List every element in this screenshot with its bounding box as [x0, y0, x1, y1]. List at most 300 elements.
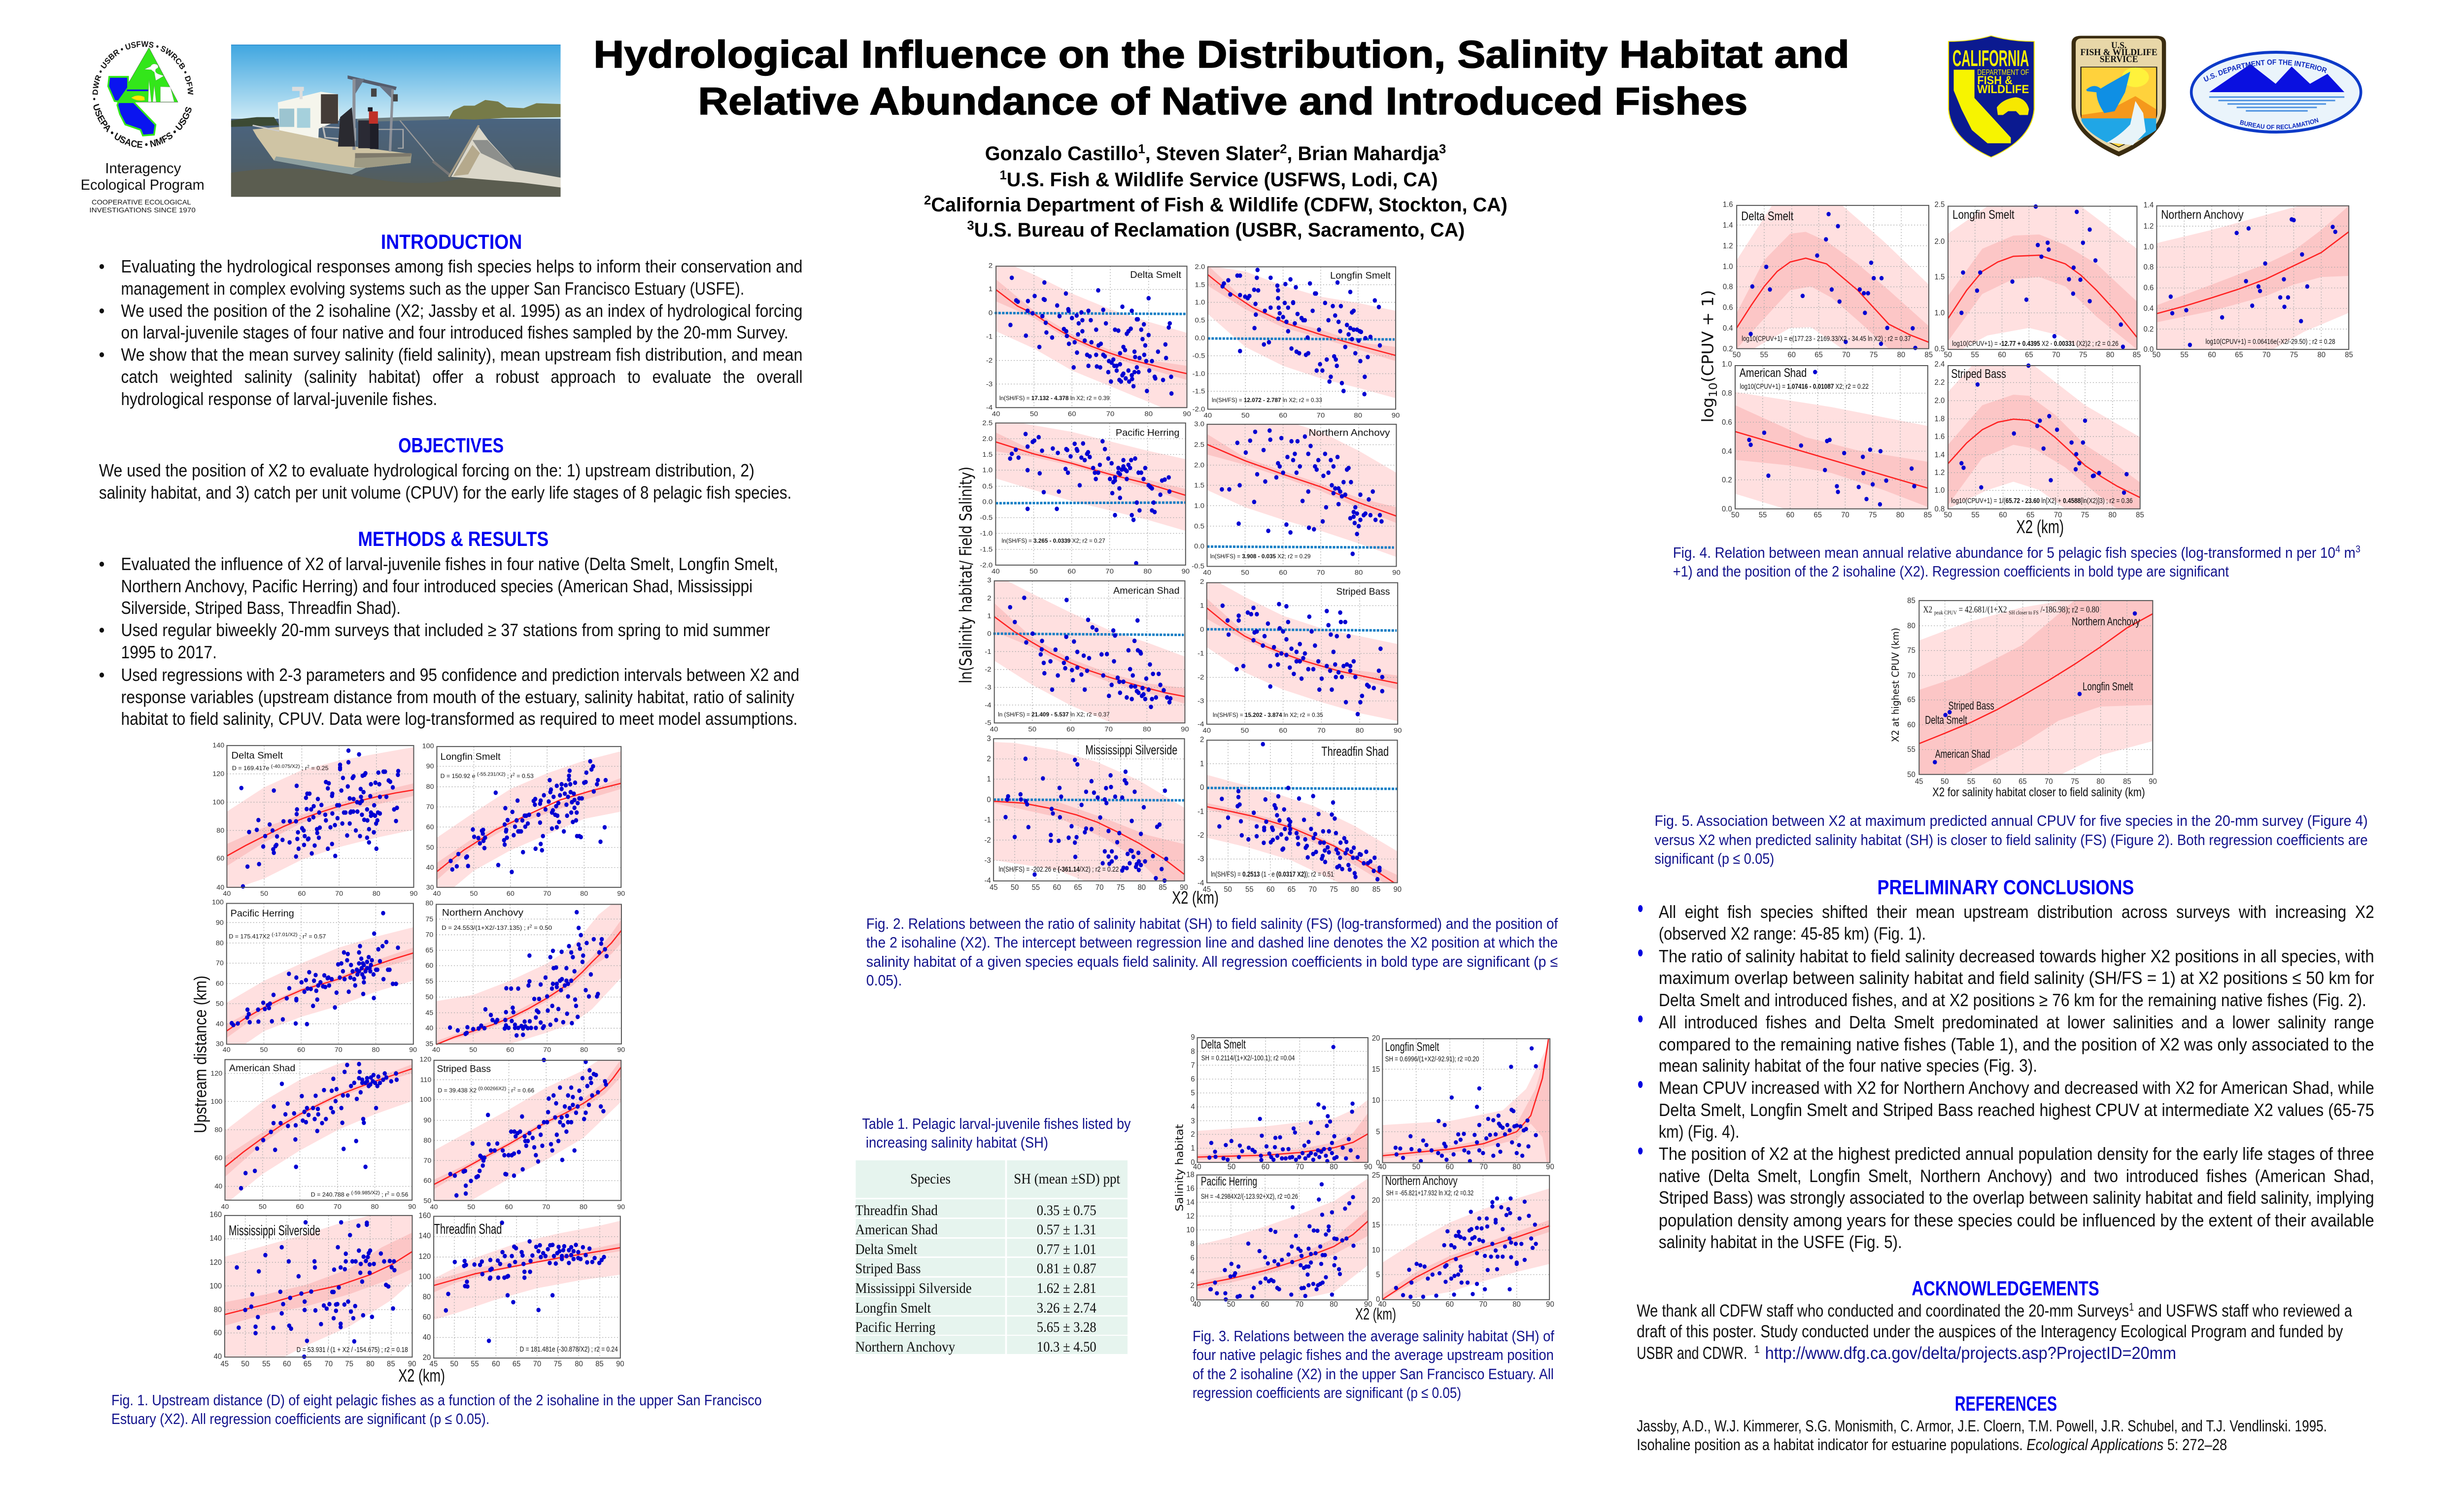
- plot: fig 2 delta smelt: Delta Smelt: [1130, 269, 1181, 280]
- plot: fig 1 striped bass: (0.00266X2): [479, 1086, 506, 1091]
- plot: fig 2 northern anchovy: 50: [1241, 569, 1249, 577]
- plot: fig 3 delta smelt: 9: [1191, 1033, 1195, 1042]
- plot: fig 1 threadfin shad: 60: [492, 1360, 500, 1368]
- plot: fig 1 longfin smelt: 80: [426, 783, 434, 791]
- plot: fig 1 longfin smelt: = 0.53: [515, 773, 534, 779]
- figure 5: X2 at highest CPUV: 90: [2149, 778, 2157, 786]
- plot: fig 2 longfin smelt: -1.0: [1193, 370, 1205, 378]
- plot: fig 4 american shad: 65: [1814, 511, 1822, 519]
- plot: fig 4 northern anchovy: 0.2: [2144, 325, 2154, 334]
- plot: fig 2 striped bass: 50: [1241, 727, 1249, 735]
- section: preliminary conclusions: [1638, 876, 2374, 1252]
- plot: fig 4 striped bass: 2.2: [1935, 378, 1945, 387]
- plot: fig 1 longfin smelt: 30: [426, 884, 434, 891]
- table 1: salinity habitat by species: 0.81 ± 0.87: [1037, 1260, 1096, 1277]
- plot: fig 2 delta smelt: 70: [1106, 410, 1114, 418]
- plot: fig 1 striped bass: 80: [580, 1203, 587, 1211]
- plot: fig 3 delta smelt: 7: [1191, 1061, 1195, 1070]
- plot: fig 2 longfin smelt: 1.5: [1195, 281, 1205, 289]
- plot: fig 2 threadfin shad: 50: [1224, 885, 1232, 894]
- plot: fig 2 delta smelt: ln(SH/FS) = 17.132 - 4.378 ln X2; r2 = 0.39: [999, 395, 1110, 402]
- plot: fig 1 northern anchovy: 55: [425, 978, 433, 985]
- section: objectives: We used the position of X2 to evaluate hydrological forcing on the: 1) upstream distribution, 2): [99, 461, 754, 480]
- plot: fig 3 delta smelt: 3: [1191, 1117, 1195, 1125]
- plot: fig 2 american shad: ln (SH/FS) = 21.409 - 5.537 ln X2; r2 = 0.37: [998, 711, 1110, 718]
- plot: fig 1 delta smelt: 120: [212, 770, 224, 778]
- plot: fig 1 delta smelt: 2: [307, 764, 309, 769]
- plot: fig 2 northern anchovy: 0.0: [1194, 543, 1204, 550]
- plot: fig 2 longfin smelt: 0.0: [1195, 335, 1205, 342]
- plot: fig 1 delta smelt: 50: [260, 890, 268, 898]
- plot: fig 1 mississippi silverside: 60: [214, 1329, 222, 1337]
- plot: fig 3 pacific herring: 40: [1193, 1300, 1201, 1309]
- plot: fig 1 striped bass: 100: [419, 1096, 431, 1104]
- plot: fig 4 longfin smelt: 70: [2052, 351, 2060, 359]
- plot: fig 2 mississippi silverside: 60: [1053, 883, 1061, 892]
- section: acknowledgements: 1: [2129, 1301, 2134, 1313]
- plot: fig 2 delta smelt: 50: [1030, 410, 1038, 418]
- plot: fig 4 striped bass: 75: [2081, 511, 2089, 519]
- plot: fig 2 american shad: 60: [1066, 726, 1075, 733]
- logo: Interagency Ecological Program: USEPA • USACE • NMFS • USGS: [94, 103, 192, 148]
- plot: fig 3 pacific herring: 12: [1186, 1212, 1195, 1220]
- plot: fig 1 striped bass: 50: [467, 1203, 475, 1211]
- plot: fig 4 american shad: 60: [1786, 511, 1794, 519]
- plot: fig 2 delta smelt: -4: [986, 404, 992, 412]
- table 1: salinity habitat by species: Threadfin Shad: [855, 1202, 938, 1219]
- axis label: log CPUV: 10: [1707, 382, 1720, 397]
- plot: fig 3 longfin smelt: 40: [1378, 1163, 1386, 1171]
- section: acknowledgements: and USFWS staff who reviewed a: [2134, 1301, 2352, 1321]
- plot: fig 2 threadfin shad: -3: [1198, 855, 1204, 863]
- plot: fig 3 longfin smelt: 50: [1412, 1163, 1420, 1171]
- plot: fig 4 delta smelt: 0.6: [1723, 304, 1733, 312]
- plot: fig 4 longfin smelt: 1.5: [1935, 273, 1945, 281]
- plot: fig 4 delta smelt: 75: [1870, 351, 1878, 359]
- caption: fig 1: Fig. 1. Upstream distance (D) of eight pelagic fishes as a function of the 2 isohaline in the upper San Francisco: [111, 1392, 762, 1409]
- plot: fig 2 threadfin shad: 65: [1288, 885, 1296, 894]
- plot: fig 4 northern anchovy: 85: [2345, 351, 2353, 359]
- plot: fig 2 american shad: 0: [987, 630, 992, 638]
- plot: fig 1 threadfin shad: 70: [533, 1360, 541, 1368]
- plot: fig 4 delta smelt: 80: [1897, 351, 1905, 359]
- axis label: salinity ratio: ln(Salinity habitat/ Field Salinity): [957, 467, 976, 683]
- plot: fig 4 striped bass: [1935, 360, 2144, 519]
- caption: fig 4: 3: [2356, 544, 2361, 555]
- caption: fig 5: Fig. 5. Association between X2 at maximum predicted annual CPUV for five species in the 20-mm survey (Figure 4): [1655, 813, 2368, 829]
- table 1: salinity habitat by species: Northern Anchovy: [855, 1339, 956, 1355]
- plot: fig 3 pacific herring: 16: [1186, 1185, 1195, 1193]
- figure 5: X2 at highest CPUV: Northern Anchovy: [2072, 615, 2140, 628]
- figure 5: X2 at highest CPUV: Longfin Smelt: [2083, 680, 2133, 693]
- authors and affiliations: 3: [1439, 142, 1446, 156]
- figure 5: X2 at highest CPUV: X2 for salinity habitat closer to field salinity (km): [1932, 785, 2145, 799]
- plot: fig 1 mississippi silverside: 120: [209, 1258, 222, 1267]
- plot: fig 4 american shad: 75: [1869, 511, 1877, 519]
- table 1: salinity habitat by species: 0.77 ± 1.01: [1037, 1241, 1096, 1257]
- plot: fig 1 longfin smelt: 60: [507, 890, 514, 898]
- plot: fig 2 american shad: 90: [1181, 726, 1189, 733]
- axis label: log CPUV: log: [1699, 397, 1717, 423]
- plot: fig 1 longfin smelt: 90: [617, 890, 625, 898]
- plot: fig 4 longfin smelt: [1935, 201, 2141, 359]
- figure 5: X2 at highest CPUV: peak CPUV: [1934, 610, 1957, 616]
- plot: fig 1 threadfin shad: 20: [423, 1354, 431, 1362]
- caption: fig 2: 0.05).: [866, 972, 902, 989]
- plot: fig 2 striped bass: -4: [1198, 721, 1204, 728]
- plot: fig 4 longfin smelt: 2.5: [1935, 201, 1945, 209]
- plot: fig 4 american shad: 1.0: [1722, 360, 1732, 369]
- plot: fig 1 striped bass: 110: [420, 1076, 431, 1084]
- plot: fig 2 longfin smelt: ln(SH/FS) = 12.072 - 2.787 ln X2; r2 = 0.33: [1212, 397, 1322, 404]
- plot: fig 2 delta smelt: -3: [986, 380, 992, 388]
- plot: fig 4 striped bass: 50: [1944, 511, 1952, 519]
- plot: fig 2 mississippi silverside: 65: [1074, 883, 1082, 892]
- section: introduction: management in complex evolving systems such as the upper San Francisco Estuary (USFE).: [121, 279, 744, 299]
- title: Relative Abundance of Native and Introduced Fishes: [698, 80, 1747, 123]
- plot: fig 3 pacific herring: 90: [1364, 1300, 1372, 1309]
- figure 5: X2 at highest CPUV: 45: [1915, 778, 1923, 786]
- plot: fig 1 mississippi silverside: 80: [214, 1306, 222, 1314]
- plot: fig 2 pacific herring: 0.5: [982, 483, 992, 490]
- plot: fig 4 northern anchovy: 0.0: [2144, 345, 2154, 354]
- plot: fig 1 threadfin shad: Threadfin Shad: [434, 1221, 502, 1237]
- plot: fig 4 striped bass: 2.4: [1935, 360, 1945, 369]
- plot: fig 1 mississippi silverside: 65: [304, 1360, 311, 1368]
- plot: fig 2 american shad: -2: [985, 666, 992, 674]
- section: methods and results: response variables (upstream distance from mouth of the estuary, salinity habitat, ratio of salinity: [121, 688, 794, 707]
- plot: fig 4 american shad: 70: [1841, 511, 1849, 519]
- plot: fig 4 striped bass: Striped Bass: [1951, 367, 2006, 381]
- plot: fig 2 delta smelt: -1: [986, 333, 992, 340]
- table 1: salinity habitat by species: 10.3 ± 4.50: [1037, 1339, 1096, 1355]
- plot: fig 1 striped bass: D = 39.438 X2: [438, 1087, 477, 1094]
- plot: fig 3 delta smelt: 50: [1228, 1163, 1235, 1171]
- figure 5: X2 at highest CPUV: 55: [1907, 745, 1916, 754]
- plot: fig 1 threadfin shad: 100: [418, 1273, 431, 1281]
- plot: fig 2 longfin smelt: 1.0: [1195, 299, 1205, 306]
- plot: fig 2 mississippi silverside: 55: [1032, 883, 1040, 892]
- table 1: salinity habitat by species: 5.65 ± 3.28: [1037, 1319, 1096, 1335]
- plot: fig 2 longfin smelt: 80: [1354, 412, 1362, 420]
- plot: fig 2 threadfin shad: Threadfin Shad: [1321, 744, 1389, 759]
- plot: fig 3 pacific herring: Pacific Herring: [1201, 1175, 1257, 1188]
- figure 5: X2 at highest CPUV: 85: [2123, 778, 2131, 786]
- caption: fig 5: versus X2 when predicted salinity habitat (SH) is closer to field salinity (FS) (Figure 2). Both regression coefficients are: [1655, 832, 2368, 848]
- plot: fig 2 pacific herring: 40: [992, 568, 1000, 576]
- plot: fig 1 striped bass: 50: [423, 1197, 431, 1205]
- photo: survey boat towing net: [231, 45, 561, 197]
- section: preliminary conclusions: Delta Smelt, Longfin Smelt and Striped Bass reached highest CPUV at intermediate X2 values (65-75: [1659, 1101, 2374, 1120]
- plot: fig 3 northern anchovy: 10: [1372, 1246, 1380, 1254]
- plot: fig 2 pacific herring: 60: [1067, 568, 1076, 576]
- table 1: salinity habitat by species: 1.62 ± 2.81: [1037, 1280, 1096, 1296]
- plot: fig 4 delta smelt: 0.2: [1723, 345, 1733, 353]
- plot: fig 1 delta smelt: 40: [216, 884, 224, 891]
- figure 4: CPUV panels: [1673, 201, 2361, 580]
- caption: fig 3: [1193, 1328, 1554, 1401]
- plot: fig 1 striped bass: 40: [430, 1203, 438, 1211]
- plot: fig 4 northern anchovy: 70: [2262, 351, 2270, 359]
- plot: fig 4 longfin smelt: log10(CPUV+1) = -12.77 + 0.4395 X2 - 0.00331 (X2)2 ; r2 = 0.26: [1952, 340, 2119, 348]
- plot: fig 2 northern anchovy: -0.5: [1192, 563, 1204, 570]
- figure 5: X2 at highest CPUV: 70: [2045, 778, 2053, 786]
- plot: fig 1 northern anchovy: 70: [425, 931, 433, 939]
- section: methods and results: 1995 to 2017.: [121, 643, 217, 662]
- plot: fig 4 striped bass: 1.0: [1935, 486, 1945, 495]
- plot: fig 1 longfin smelt: 70: [426, 803, 434, 811]
- plot: fig 2 striped bass: -1: [1198, 650, 1204, 658]
- plot: fig 3 pacific herring: 0: [1190, 1295, 1195, 1304]
- figure 1: upstream distance panels: [111, 742, 762, 1427]
- figure 5: X2 at highest CPUV: 65: [1907, 696, 1916, 704]
- plot: fig 1 striped bass: [419, 1056, 625, 1211]
- plot: fig 1 threadfin shad: 50: [450, 1360, 458, 1368]
- plot: fig 1 mississippi silverside: 45: [220, 1360, 229, 1368]
- plot: fig 1 mississippi silverside: 70: [325, 1360, 333, 1368]
- plot: fig 4 american shad: log10(CPUV+1) = 1.07416 - 0.01087 X2; r2 = 0.22: [1740, 383, 1869, 391]
- plot: fig 3 longfin smelt: 90: [1546, 1163, 1554, 1171]
- section: introduction: We used the position of the 2 isohaline (X2; Jassby et al. 1995) as an index of hydrological forcing: [121, 302, 803, 321]
- plot: fig 2 american shad: 3: [987, 576, 992, 584]
- section: preliminary conclusions: PRELIMINARY CONCLUSIONS: [1878, 876, 2134, 899]
- plot: fig 2 longfin smelt: 0.5: [1195, 317, 1205, 324]
- section: acknowledgements: http://www.dfg.ca.gov/delta/projects.asp?ProjectID=20mm: [1765, 1344, 2176, 1363]
- table 1: salinity habitat by species: Table 1. Pelagic larval-juvenile fishes listed by: [862, 1116, 1130, 1132]
- caption: fig 1: [111, 1392, 762, 1427]
- plot: fig 3 northern anchovy: 50: [1412, 1300, 1420, 1309]
- plot: fig 2 threadfin shad: 1: [1200, 760, 1204, 768]
- plot: fig 4 delta smelt: 55: [1760, 351, 1768, 359]
- plot: fig 1 northern anchovy: 75: [425, 915, 433, 923]
- plot: fig 1 mississippi silverside: [209, 1211, 416, 1368]
- logo: Interagency Ecological Program: Interagency: [105, 161, 181, 177]
- plot: fig 4 delta smelt: 0.8: [1723, 283, 1733, 291]
- section: preliminary conclusions: Delta Smelt and introduced fishes, and at X2 positions ≥ 76 km for the remaining native fishes (Fig. 2).: [1659, 991, 2366, 1010]
- plot: fig 1 delta smelt: [212, 742, 418, 898]
- plot: fig 1 delta smelt: 60: [216, 855, 224, 863]
- plot: fig 1 delta smelt: Delta Smelt: [232, 750, 283, 761]
- plot: fig 1 delta smelt: 70: [335, 890, 343, 898]
- plot: fig 3 pacific herring: 70: [1295, 1300, 1303, 1309]
- plot: fig 1 striped bass: 70: [423, 1157, 431, 1165]
- section: methods and results: Used regressions with 2-3 parameters and 95 confidence and prediction intervals between X2 and: [121, 666, 799, 685]
- plot: fig 3 longfin smelt: 20: [1372, 1034, 1380, 1043]
- plot: fig 1 striped bass: 60: [423, 1177, 431, 1185]
- plot: fig 2 longfin smelt: 90: [1392, 412, 1400, 420]
- logo: Bureau of Reclamation: BUREAU OF RECLAMATION: [2240, 118, 2319, 129]
- caption: fig 3: regression coefficients are significant (p ≤ 0.05): [1193, 1385, 1461, 1401]
- plot: fig 4 delta smelt: 60: [1787, 351, 1796, 359]
- plot: fig 2 american shad: -1: [985, 648, 992, 656]
- plot: fig 2 northern anchovy: 2.0: [1194, 462, 1204, 469]
- plot: fig 3 delta smelt: 6: [1191, 1075, 1195, 1084]
- plot: fig 3 longfin smelt: 0: [1376, 1159, 1380, 1167]
- section: introduction: INTRODUCTION: [381, 230, 522, 253]
- table 1: salinity habitat by species: [855, 1116, 1130, 1355]
- plot: fig 1 pacific herring: [212, 899, 417, 1054]
- plot: fig 3 longfin smelt: 60: [1446, 1163, 1454, 1171]
- plot: fig 1 northern anchovy: 45: [425, 1009, 433, 1017]
- plot: fig 4 longfin smelt: 2.0: [1935, 237, 1945, 246]
- plot: fig 1 longfin smelt: 100: [422, 742, 434, 750]
- plot: fig 1 american shad: 120: [210, 1070, 222, 1078]
- section: preliminary conclusions: Striped Bass) was strongly associated to the overlap between salinity habitat and field salinity, implying: [1659, 1188, 2374, 1208]
- plot: fig 1 northern anchovy: 2: [530, 924, 532, 929]
- plot: fig 2 pacific herring: 2.0: [982, 435, 992, 443]
- logo: California Department of Fish and Wildlife: WILDLIFE: [1977, 82, 2029, 96]
- plot: fig 2 mississippi silverside: 85: [1159, 883, 1167, 892]
- plot: fig 2 mississippi silverside: 90: [1180, 883, 1188, 892]
- authors and affiliations: 2: [924, 193, 931, 207]
- plot: fig 4 delta smelt: 70: [1842, 351, 1850, 359]
- plot: fig 1 delta smelt: D = 169.417e: [232, 765, 269, 772]
- plot: fig 4 longfin smelt: 65: [2025, 351, 2033, 359]
- section: introduction: Evaluating the hydrological responses among fish species helps to inform their conservation and: [121, 257, 803, 276]
- caption: fig 1: Estuary (X2). All regression coefficients are significant (p ≤ 0.05).: [111, 1411, 489, 1427]
- figure 5: X2 at highest CPUV: 50: [1907, 771, 1916, 779]
- plot: fig 3 pacific herring: 18: [1186, 1171, 1195, 1179]
- plot: fig 2 mississippi silverside: 0: [987, 796, 991, 804]
- plot: fig 1 longfin smelt: 2: [513, 772, 515, 777]
- section: methods and results: METHODS & RESULTS: [358, 527, 548, 550]
- section: preliminary conclusions: maximum overlap between salinity habitat and field salinity (SH/FS = 1) at X2 positions ≤ 50 km for: [1659, 969, 2374, 988]
- plot: fig 2 threadfin shad: 90: [1393, 885, 1402, 894]
- table 1: salinity habitat by species: 3.26 ± 2.74: [1037, 1300, 1096, 1316]
- plot: fig 3 longfin smelt: SH = 0.6996/(1+X2/-92.91); r2 =0.20: [1385, 1055, 1479, 1063]
- plot: fig 1 mississippi silverside: 85: [387, 1360, 395, 1368]
- plot: fig 2 pacific herring: 1.5: [982, 451, 992, 459]
- plot: fig 1 threadfin shad: D = 181.481e (-30.878/X2) ; r2 = 0.24: [520, 1346, 618, 1354]
- plot: fig 1 threadfin shad: 75: [554, 1360, 562, 1368]
- caption: fig 5: significant (p ≤ 0.05): [1655, 850, 1774, 867]
- plot: fig 2 longfin smelt: 60: [1279, 412, 1287, 420]
- plot: fig 2 striped bass: 2: [1200, 578, 1204, 586]
- plot: fig 1 mississippi silverside: 55: [262, 1360, 271, 1368]
- plot: fig 1 longfin smelt: 80: [580, 890, 588, 898]
- section: objectives: salinity habitat, and 3) catch per unit volume (CPUV) for the early life stages of 8 pelagic fish species.: [99, 483, 791, 503]
- caption: fig 3: four native pelagic fishes and the average upstream position: [1193, 1347, 1554, 1363]
- plot: fig 1 delta smelt: 140: [212, 742, 224, 749]
- plot: fig 4 striped bass: 60: [1999, 511, 2007, 519]
- plot: fig 4 northern anchovy: 1.0: [2144, 243, 2154, 251]
- section: preliminary conclusions: km) (Fig. 4).: [1659, 1122, 1740, 1142]
- plot: fig 1 longfin smelt: Longfin Smelt: [441, 751, 501, 762]
- logo: California Department of Fish and Wildlife: [1949, 36, 2034, 157]
- plot: fig 1 northern anchovy: 50: [425, 993, 433, 1001]
- plot: fig 1 delta smelt: (-40.075/X2): [271, 764, 300, 769]
- figure 5: X2 at highest CPUV: 75: [1907, 646, 1916, 655]
- authors and affiliations: , Steven Slater: [1145, 143, 1280, 165]
- authors and affiliations: Gonzalo Castillo: [985, 143, 1129, 165]
- plot: fig 1 american shad: 100: [210, 1098, 222, 1106]
- plot: fig 1 longfin smelt: D = 150.92 e: [441, 773, 476, 779]
- plot: fig 2 striped bass: -3: [1198, 697, 1204, 705]
- authors and affiliations: California Department of Fish & Wildlife (CDFW, Stockton, CA): [931, 194, 1507, 216]
- table 1: salinity habitat by species: Mississippi Silverside: [855, 1280, 972, 1296]
- plot: fig 4 striped bass: 70: [2054, 511, 2062, 519]
- axis label: upstream distance: Upstream distance (km): [191, 976, 210, 1133]
- plot: fig 1 mississippi silverside: 75: [345, 1360, 353, 1368]
- plot: fig 4 longfin smelt: 55: [1971, 351, 1979, 359]
- table 1: salinity habitat by species: increasing salinity habitat (SH): [866, 1134, 1048, 1151]
- plot: fig 3 pacific herring: 8: [1190, 1240, 1195, 1248]
- caption: fig 5: [1655, 813, 2368, 867]
- section: methods and results: Evaluated the influence of X2 of larval-juvenile fishes in four native (Delta Smelt, Longfin Smelt,: [121, 555, 778, 574]
- plot: fig 1 pacific herring: 100: [212, 899, 224, 906]
- plot: fig 2 striped bass: 40: [1202, 727, 1211, 735]
- plot: fig 2 northern anchovy: 90: [1392, 569, 1401, 577]
- plot: fig 2 northern anchovy: 0.5: [1194, 523, 1204, 530]
- plot: fig 2 threadfin shad: 60: [1266, 885, 1274, 894]
- authors and affiliations: 2: [1280, 142, 1287, 156]
- logo: Bureau of Reclamation: [2190, 51, 2362, 134]
- plot: fig 1 mississippi silverside: 40: [214, 1353, 222, 1361]
- figure 5: X2 at highest CPUV: 65: [2019, 778, 2027, 786]
- section: preliminary conclusions: (observed X2 range: 45-85 km) (Fig. 1).: [1659, 924, 1926, 944]
- plot: fig 3 longfin smelt: Longfin Smelt: [1385, 1040, 1439, 1054]
- plot: fig 1 threadfin shad: 45: [430, 1360, 438, 1368]
- plot: fig 1 threadfin shad: 80: [423, 1293, 431, 1301]
- plot: fig 3 delta smelt: Delta Smelt: [1201, 1038, 1246, 1051]
- plot: fig 2 mississippi silverside: 70: [1095, 883, 1103, 892]
- plot: fig 2 american shad: 40: [990, 726, 998, 733]
- plot: fig 3 pacific herring: 4: [1190, 1268, 1195, 1276]
- plot: fig 2 mississippi silverside: -2: [985, 836, 991, 845]
- plot: fig 1 mississippi silverside: 140: [209, 1234, 222, 1243]
- plot: fig 4 northern anchovy: [2144, 201, 2353, 359]
- plot: fig 1 american shad: 80: [371, 1203, 379, 1211]
- plot: fig 4 american shad: 0.6: [1722, 418, 1732, 427]
- caption: fig 4: 4: [2335, 544, 2340, 555]
- plot: fig 2 american shad: 1: [987, 612, 992, 620]
- plot: fig 1 striped bass: = 0.66: [515, 1087, 534, 1094]
- plot: fig 1 mississippi silverside: 80: [366, 1360, 375, 1368]
- plot: fig 1 mississippi silverside: D = 53.931 / (1 + X2 / -154.675) ; r2 = 0.18: [297, 1346, 408, 1354]
- plot: fig 1 american shad: 50: [259, 1203, 267, 1211]
- figure 5: X2 at highest CPUV: 85: [1907, 597, 1916, 605]
- plot: fig 4 longfin smelt: 75: [2079, 351, 2087, 359]
- plot: fig 4 american shad: American Shad: [1740, 366, 1807, 380]
- plot: fig 3 pacific herring: 2: [1190, 1282, 1195, 1290]
- plot: fig 2 threadfin shad: 2: [1200, 736, 1204, 744]
- plot: fig 4 northern anchovy: 65: [2235, 351, 2243, 359]
- plot: fig 2 pacific herring: 0.0: [982, 499, 992, 506]
- plot: fig 2 striped bass: ln(SH/FS) = 15.202 - 3.874 ln X2; r2 = 0.35: [1213, 711, 1323, 718]
- plot: fig 2 threadfin shad: 70: [1308, 885, 1317, 894]
- plot: fig 4 striped bass: 2.0: [1935, 397, 1945, 405]
- plot: fig 1 pacific herring: 50: [216, 1000, 224, 1008]
- plot: fig 2 delta smelt: 60: [1068, 410, 1076, 418]
- plot: fig 2 mississippi silverside: -4: [985, 877, 991, 885]
- plot: fig 1 striped bass: 90: [423, 1117, 431, 1124]
- plot: fig 2 longfin smelt: -2.0: [1193, 406, 1205, 413]
- plot: fig 4 northern anchovy: 1.2: [2144, 222, 2154, 231]
- authors and affiliations: 1: [1138, 142, 1145, 156]
- logo: Bureau of Reclamation: U.S. DEPARTMENT OF THE INTERIOR: [2203, 59, 2327, 82]
- plot: fig 3 northern anchovy: 80: [1512, 1300, 1521, 1309]
- plot: fig 1 delta smelt: 60: [298, 890, 306, 898]
- plot: fig 3 northern anchovy: 5: [1376, 1271, 1380, 1279]
- plot: fig 3 delta smelt: 4: [1191, 1103, 1195, 1111]
- plot: fig 1 pacific herring: 2: [305, 932, 307, 937]
- plot: fig 1 american shad: = 0.56: [389, 1191, 409, 1198]
- plot: fig 1 striped bass: 80: [423, 1137, 431, 1145]
- authors and affiliations: , Brian Mahardja: [1287, 143, 1439, 165]
- plot: fig 4 american shad: 85: [1924, 511, 1932, 519]
- plot: fig 1 american shad: 90: [408, 1203, 416, 1211]
- plot: fig 1 threadfin shad: 80: [575, 1360, 583, 1368]
